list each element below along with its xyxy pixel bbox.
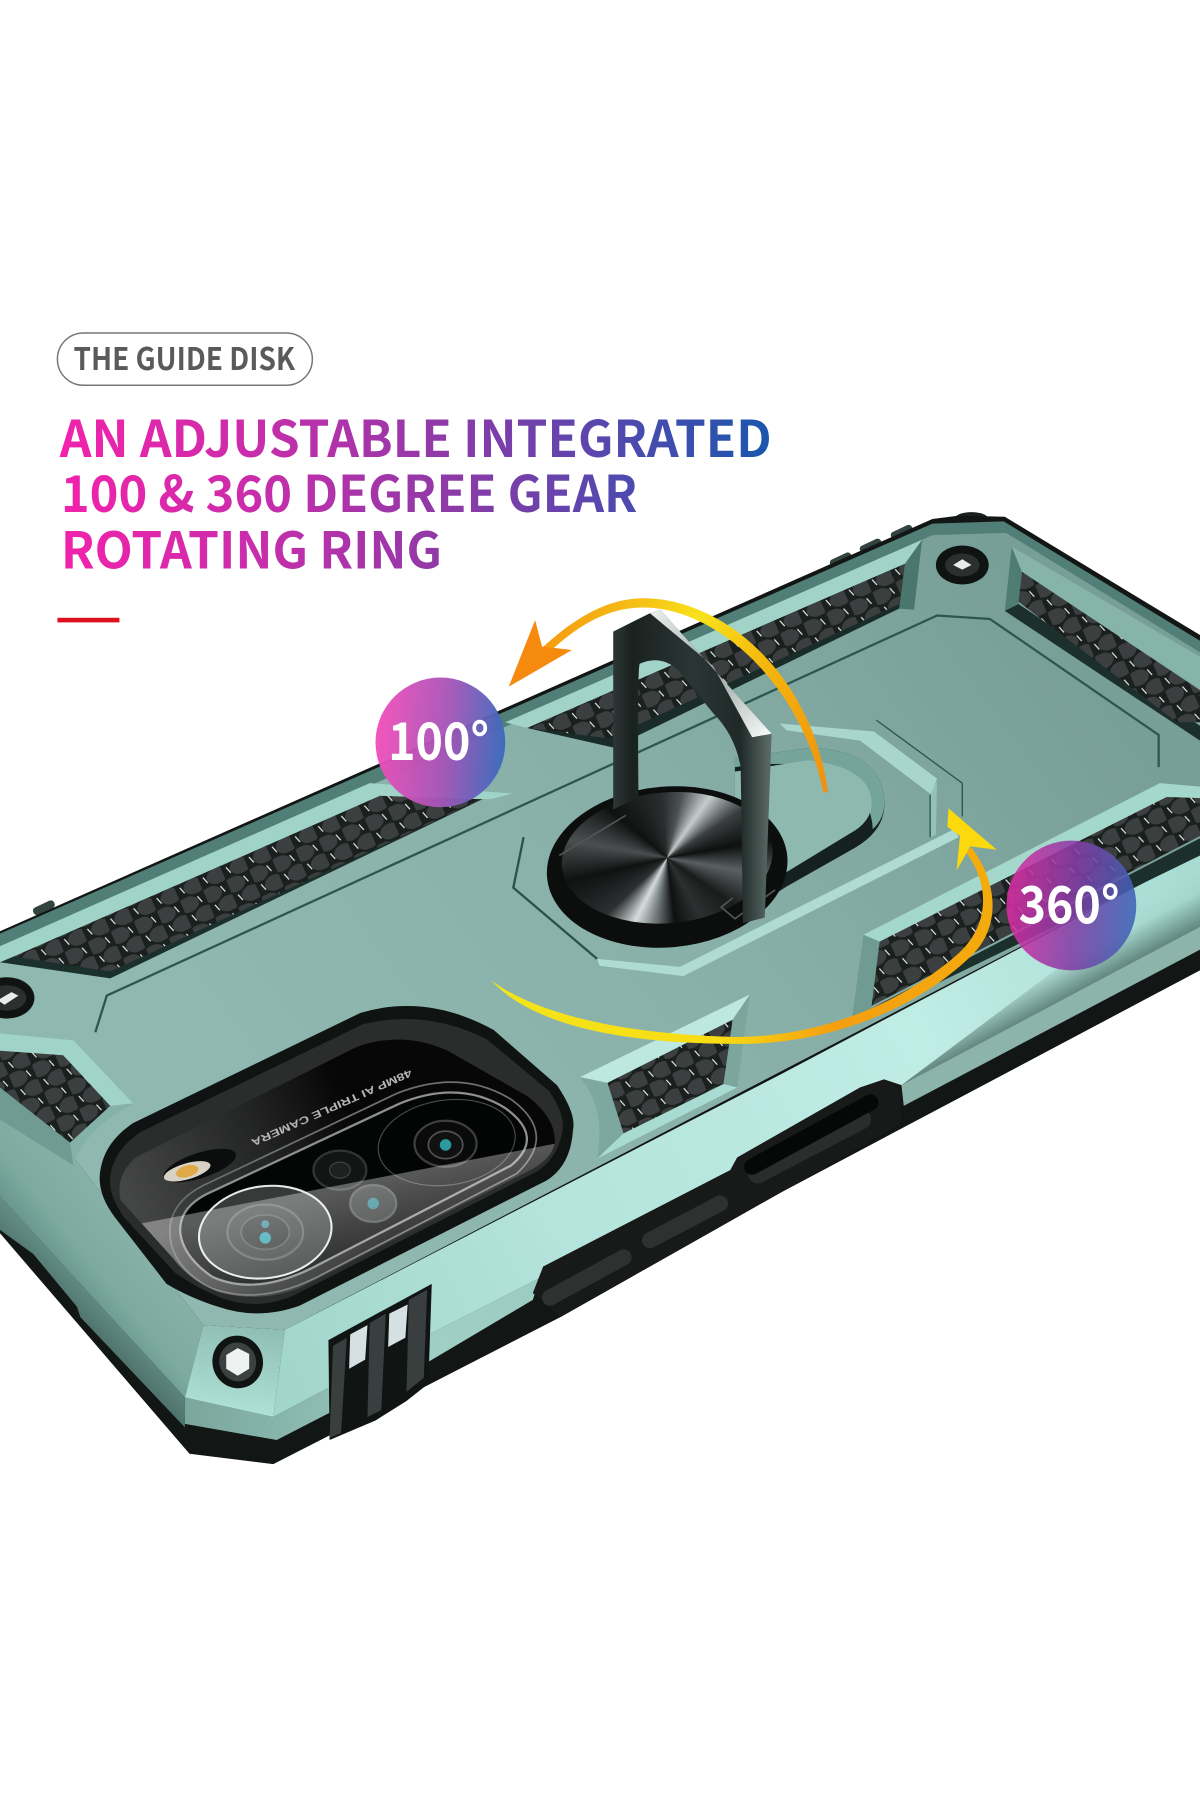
- arrow: 360 degree rotation: [491, 808, 997, 1044]
- glass reflection: [142, 1144, 554, 1297]
- lower band right: [901, 927, 1200, 1106]
- frame: top center: [505, 540, 922, 728]
- lower left edge: [0, 1197, 185, 1427]
- title: AN ADJUSTABLE INTEGRATED: [59, 398, 772, 472]
- grip strip: top right: [1019, 572, 1200, 722]
- camera housing: [100, 1006, 574, 1313]
- grip frames: [0, 540, 1200, 1166]
- badge: 100 degrees: 100°: [388, 700, 489, 775]
- camera module: [100, 1006, 574, 1321]
- disk brushed face: [556, 783, 778, 932]
- ring holder seat: [513, 720, 962, 976]
- lit side band: [273, 853, 1200, 1417]
- rim: [0, 521, 1200, 1079]
- back plate: [0, 533, 1200, 1330]
- frame: top right: [1005, 547, 1022, 611]
- phone case: [0, 512, 1200, 1464]
- flash: [160, 1142, 240, 1189]
- case silhouette: [0, 516, 1200, 1464]
- bottom vents: [328, 1284, 432, 1440]
- lit band shade: [901, 861, 1200, 1085]
- stadium recess: [735, 748, 884, 907]
- arrow: 100 degree rotation: [509, 598, 828, 792]
- camera glass: [119, 1040, 555, 1296]
- metal disk: [540, 776, 794, 958]
- frame: left long: [0, 783, 512, 962]
- screw: upper right: [936, 545, 989, 584]
- ring stand: [613, 610, 772, 923]
- small lenses: [313, 1151, 396, 1222]
- lower band left: [185, 1278, 540, 1440]
- badge: 100 degrees: [376, 678, 505, 807]
- red accent bar: [57, 618, 119, 622]
- grip strip: lower center: [607, 1020, 733, 1133]
- frame: lower right: [864, 783, 1200, 942]
- screw: left: [0, 977, 34, 1019]
- upper lens: [373, 1091, 521, 1194]
- octagon lit base edge: [597, 829, 959, 976]
- main lens: [193, 1177, 338, 1287]
- frame: lower left: [0, 1033, 133, 1106]
- octagon right walls: [930, 781, 937, 837]
- top edge buttons: [32, 512, 988, 916]
- title: ROTATING RING: [61, 509, 442, 583]
- grip strip: lower right: [872, 797, 1200, 1006]
- screw plate: [185, 1325, 285, 1417]
- title: [59, 398, 772, 583]
- badge: 360 degrees: 360°: [1019, 863, 1120, 938]
- silver edge: [650, 610, 772, 737]
- grip strip: lower left: [0, 1051, 110, 1143]
- octagon top facet: [780, 723, 937, 795]
- side buttons: [533, 1079, 901, 1317]
- screw: bottom: [206, 1330, 269, 1394]
- disk notches: [559, 815, 775, 919]
- ring body: [613, 610, 772, 923]
- grip strip: top center: [527, 564, 905, 738]
- plate outlines: [95, 616, 1159, 1032]
- grip strip: left long: [14, 796, 482, 971]
- octagon outline: [513, 837, 597, 959]
- label pill: THE GUIDE DISK: THE GUIDE DISK: [73, 334, 296, 379]
- frame: lower center: [580, 994, 750, 1083]
- badge: 360 degrees: [1007, 841, 1136, 970]
- lens surround: [180, 1093, 527, 1285]
- title: 100 & 360 DEGREE GEAR: [61, 453, 637, 527]
- camera caption: 48MP AI TRIPLE CAMERA: [249, 1066, 413, 1148]
- upper right frame: [1005, 547, 1200, 741]
- lower left body: [0, 1062, 203, 1398]
